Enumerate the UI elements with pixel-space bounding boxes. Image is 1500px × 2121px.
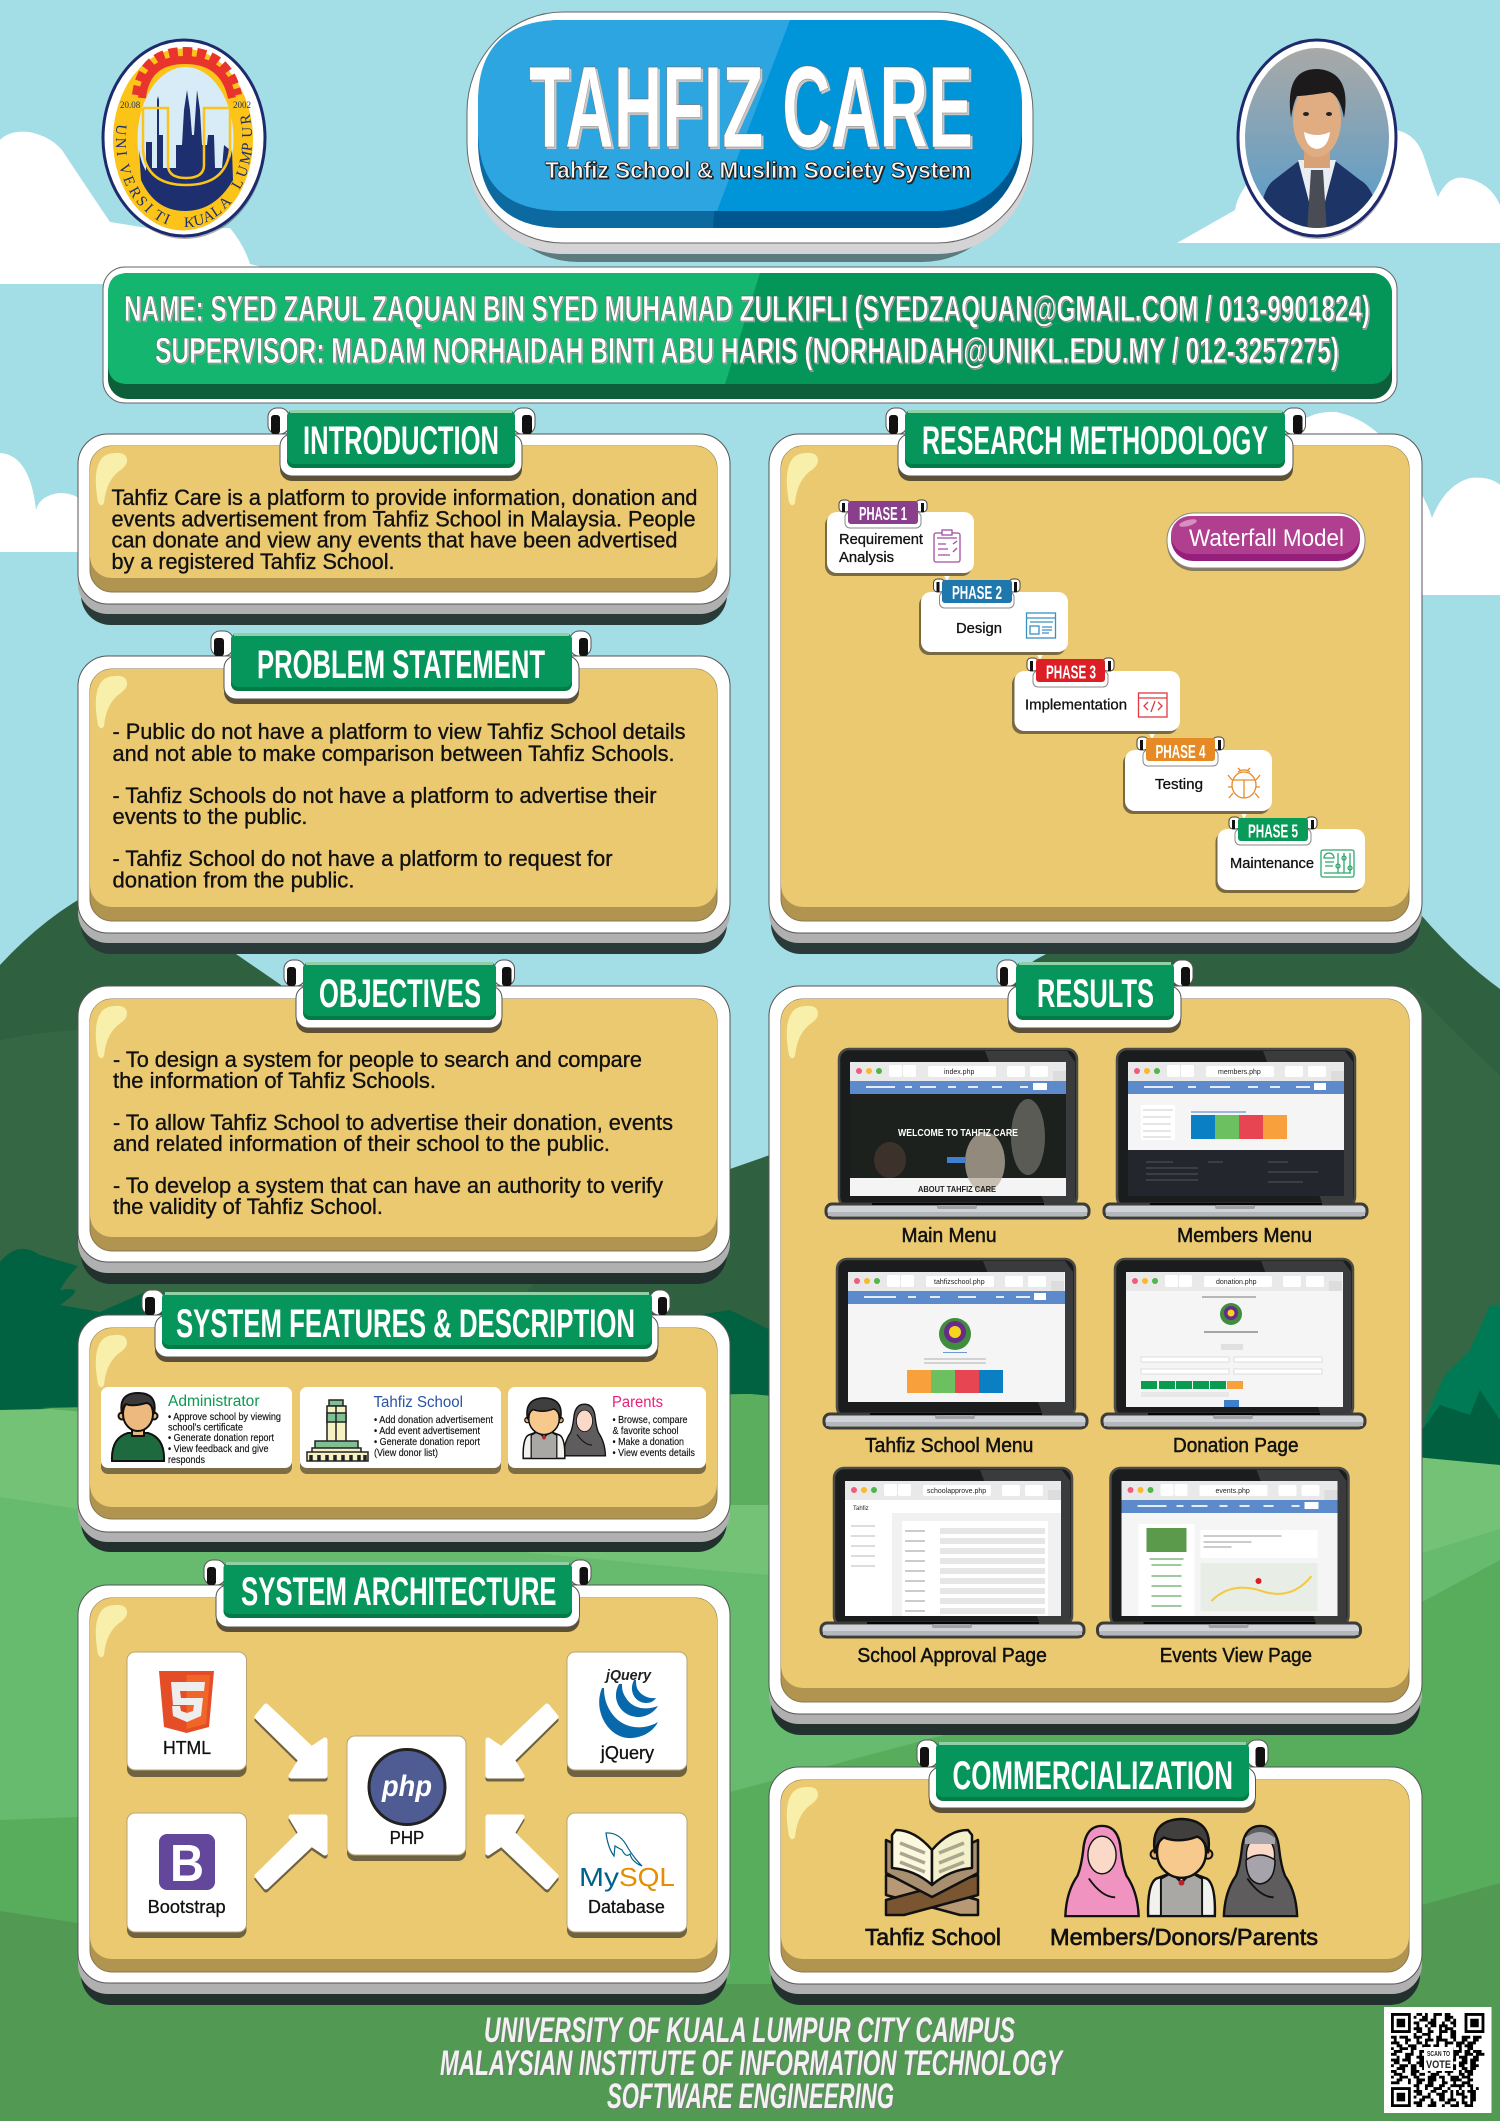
laptop: donation page: donation.php [1216, 1279, 1257, 1286]
heading: research methodology: RESEARCH METHODOLOGY [922, 419, 1268, 463]
panel: objectives [78, 960, 730, 1284]
card: parents [508, 1387, 706, 1474]
card: jQuery: jQuery [600, 1743, 654, 1763]
card: administrator [101, 1387, 292, 1474]
heading: problem statement: PROBLEM STATEMENT [257, 643, 545, 687]
label: members donors parents: Members/Donors/Parents [1050, 1924, 1318, 1950]
card: administrator: school's certificate [168, 1422, 243, 1434]
heading: system architecture: SYSTEM ARCHITECTURE [241, 1570, 556, 1614]
laptop: school approval: Tahfiz [853, 1506, 869, 1512]
panel: problem statement [78, 631, 730, 954]
heading: objectives [284, 960, 514, 1033]
panel: results [769, 960, 1422, 1735]
heading: commercialization: COMMERCIALIZATION [952, 1754, 1233, 1798]
text: objectives: - To develop a system that can have an authority to verify [113, 1173, 663, 1198]
phase 5 card: Maintenance [1230, 856, 1314, 872]
phase 1 card: PHASE 1 [859, 504, 907, 524]
phase 3 card: PHASE 3 [1046, 662, 1096, 682]
laptop: main menu: index.php [944, 1069, 974, 1076]
card: tahfiz school: • Generate donation report [374, 1436, 480, 1448]
card: jQuery [567, 1652, 687, 1777]
mountains [0, 860, 1500, 1480]
laptop: events view: events.php [1216, 1488, 1250, 1495]
phase 4 card: Testing [1155, 777, 1203, 793]
card: administrator: • View feedback and give [168, 1443, 269, 1455]
label: events view page: Events View Page [1160, 1645, 1312, 1667]
card: PHP: PHP [390, 1828, 424, 1848]
icon: jquery: jQuery [604, 1667, 652, 1684]
footer text: SOFTWARE ENGINEERING [607, 2077, 894, 2116]
laptop: main menu [826, 1049, 1089, 1218]
card: parents: Parents [612, 1394, 663, 1411]
card: administrator: Administrator [168, 1393, 260, 1410]
icon: controls [1321, 850, 1354, 877]
phase 2 card [919, 579, 1068, 660]
phase 4 card: PHASE 4 [1156, 742, 1206, 762]
arrow: bootstrap to php [257, 1817, 325, 1890]
icon: bootstrap: B [170, 1835, 204, 1893]
footer text: MALAYSIAN INSTITUTE OF INFORMATION TECHNOLOGY [440, 2044, 1064, 2083]
card: tahfiz school: Tahfiz School [374, 1394, 463, 1411]
icon: administrator [112, 1393, 164, 1461]
card: PHP [347, 1736, 466, 1861]
clouds [0, 129, 1500, 595]
heading: results [997, 960, 1193, 1033]
icon: window [1026, 613, 1056, 638]
card: HTML: HTML [163, 1738, 211, 1758]
panel: system features [78, 1290, 730, 1552]
footer text: UNIVERSITY OF KUALA LUMPUR CITY CAMPUS [484, 2011, 1015, 2050]
phase 5 card [1216, 817, 1365, 893]
text: introduction: Tahfiz Care is a platform to provide information, donation and [112, 485, 698, 510]
phase 2 card: Design [956, 621, 1002, 637]
heading: results: RESULTS [1037, 972, 1154, 1016]
heading: research methodology [886, 408, 1306, 481]
label: tahfiz school: Tahfiz School [865, 1924, 1001, 1950]
icon: mysql: SQL [619, 1862, 675, 1892]
laptop: members menu: members.php [1218, 1069, 1261, 1076]
label: school approval page: School Approval Page [857, 1645, 1047, 1667]
text: objectives: the information of Tahfiz Schools. [113, 1068, 436, 1093]
card: HTML [127, 1652, 246, 1777]
text: objectives [113, 1047, 673, 1219]
icon: UniKL logo [103, 40, 266, 239]
title text: TAHFIZ CARE [529, 42, 973, 172]
text: introduction: can donate and view any events that have been advertised [112, 528, 678, 552]
text: objectives: and related information of their school to the public. [113, 1131, 610, 1156]
phase 5 card: PHASE 5 [1248, 822, 1298, 842]
portrait [1238, 40, 1397, 239]
heading: system features [142, 1290, 670, 1362]
pill: waterfall model: Waterfall Model [1189, 525, 1344, 552]
icon: html5 [159, 1671, 214, 1733]
text: objectives: the validity of Tahfiz School. [113, 1194, 383, 1219]
text: problem statement: donation from the public. [112, 868, 354, 892]
card: Bootstrap: Bootstrap [148, 1897, 226, 1917]
card: Bootstrap [127, 1813, 246, 1938]
heading: introduction: INTRODUCTION [303, 419, 499, 463]
label: tahfiz school menu: Tahfiz School Menu [865, 1435, 1033, 1457]
logo dates: 20.08 [120, 100, 141, 110]
text: problem statement: - Public do not have a platform to view Tahfiz School details [112, 719, 686, 744]
phase 1 card: Analysis [839, 550, 894, 566]
text: problem statement: - Tahfiz Schools do not have a platform to advertise their [112, 783, 656, 808]
icon: mysql: My [579, 1862, 619, 1892]
laptop: tahfiz school menu: tahfizschool.php [934, 1279, 985, 1286]
icon: UniKL logo: 2002 [233, 100, 251, 110]
laptop: members menu [1104, 1049, 1367, 1218]
phase 3 card [1012, 658, 1180, 739]
phase 2 card: PHASE 2 [952, 583, 1002, 603]
grass [0, 1394, 1500, 2121]
text: objectives: - To design a system for people to search and compare [113, 1047, 642, 1072]
panel: introduction [78, 408, 730, 625]
arrow: html to php [257, 1706, 325, 1779]
icon: mysql [579, 1833, 675, 1892]
card: parents: • View events details [612, 1447, 695, 1459]
card: administrator: • Generate donation report [168, 1432, 274, 1444]
text: problem statement: and not able to make comparison between Tahfiz Schools. [112, 741, 674, 766]
panel: commercialization [769, 1740, 1422, 2005]
trees [0, 1249, 1500, 1470]
logo ring text: UNIVERSITI KUALA LUMPUR [112, 113, 256, 231]
laptop: donation page [1102, 1259, 1365, 1428]
laptop: main menu: ABOUT TAHFIZ CARE [918, 1184, 996, 1194]
panel: system architecture [78, 1560, 730, 2005]
laptop: tahfiz school menu [824, 1259, 1087, 1428]
heading: system architecture [204, 1560, 591, 1632]
QR scan label: SCAN TO [1427, 2051, 1450, 2058]
banner: student and supervisor [103, 267, 1397, 403]
icon: parents [523, 1398, 605, 1458]
text: problem statement: events to the public. [112, 804, 308, 829]
card: parents: • Make a donation [612, 1436, 684, 1448]
card: MySQL database: Database [588, 1897, 665, 1917]
icon: bug [1228, 768, 1260, 798]
title capsule [467, 12, 1033, 262]
icon: code window [1138, 693, 1167, 717]
card: administrator: responds [168, 1454, 205, 1466]
phase 1 card [825, 500, 974, 581]
card: MySQL database [567, 1813, 687, 1938]
icon: php: php [381, 1770, 432, 1803]
subtitle: Tahfiz School & Muslim Society System [545, 157, 971, 183]
card: tahfiz school [300, 1387, 501, 1474]
card: tahfiz school: • Add donation advertisement [374, 1414, 493, 1426]
QR code [1384, 2007, 1492, 2113]
heading: problem statement [211, 631, 591, 704]
card: tahfiz school: • Add event advertisement [374, 1425, 480, 1437]
text: problem statement: - Tahfiz School do not have a platform to request for [112, 846, 612, 871]
card: parents: • Browse, compare [612, 1414, 688, 1426]
arrow: database to php [488, 1817, 556, 1890]
heading: system features: SYSTEM FEATURES & DESCRIPTION [176, 1302, 635, 1346]
label: main menu: Main Menu [902, 1225, 996, 1247]
heading: introduction [268, 408, 535, 481]
icon: mosque [307, 1400, 368, 1461]
panel: research methodology [769, 408, 1422, 954]
phase 1 card: Requirement [839, 532, 923, 548]
QR vote label: VOTE [1426, 2059, 1451, 2071]
laptop: school approval: schoolapprove.php [927, 1488, 986, 1495]
text: introduction: by a registered Tahfiz School. [112, 549, 394, 574]
text: objectives: - To allow Tahfiz School to advertise their donation, events [113, 1110, 673, 1135]
phase 3 card: Implementation [1025, 698, 1127, 714]
icon: members donors parents [1065, 1819, 1297, 1916]
heading: commercialization [917, 1740, 1268, 1813]
footer text [440, 2011, 1064, 2116]
arrow: jquery to php [488, 1706, 556, 1779]
phase 4 card [1123, 737, 1272, 819]
label: donation page: Donation Page [1173, 1435, 1298, 1457]
text: introduction: events advertisement from Tahfiz School in Malaysia. People [112, 506, 696, 532]
label: members menu: Members Menu [1177, 1225, 1312, 1247]
icon: clipboard [934, 530, 960, 562]
text: problem statement [112, 719, 686, 892]
card: administrator: • Approve school by viewing [168, 1411, 281, 1423]
card: tahfiz school: (View donor list) [374, 1447, 438, 1459]
laptop: main menu: WELCOME TO TAHFIZ CARE [898, 1128, 1018, 1139]
pill: waterfall model [1167, 513, 1365, 571]
card: parents: & favorite school [612, 1425, 678, 1437]
icon: quran on stand [886, 1830, 978, 1915]
heading: objectives: OBJECTIVES [319, 972, 481, 1016]
text: introduction [112, 485, 698, 574]
laptop: events view [1098, 1468, 1360, 1637]
laptop: school approval [821, 1468, 1084, 1637]
